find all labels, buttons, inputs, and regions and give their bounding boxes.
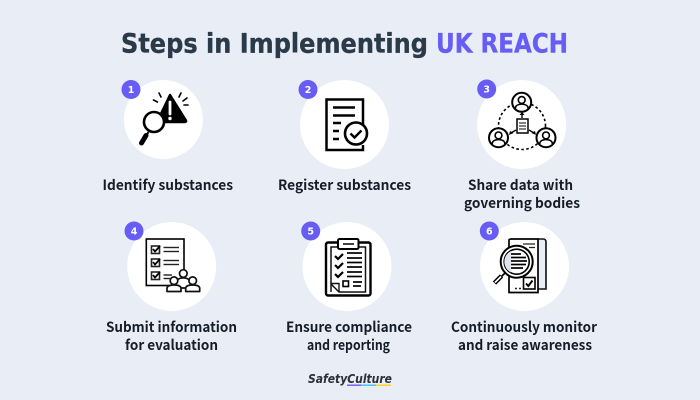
label: for evaluation: [125, 335, 218, 355]
logo: SafetyCulture: SafetyCulture: [308, 372, 392, 386]
icon: warning triangle and magnifier: [142, 93, 188, 143]
step 3: share data: [464, 80, 580, 213]
icon: magnifier over document: [494, 239, 546, 292]
step 2: register substances: [278, 80, 411, 195]
label: governing bodies: [464, 193, 580, 213]
step number badge 1: 1: [128, 85, 134, 96]
label: [464, 175, 580, 213]
step number badge 2: 2: [305, 85, 311, 96]
label: [106, 317, 237, 355]
icon: document with check: [326, 100, 367, 150]
label: and raise awareness: [458, 335, 592, 355]
step number badge 6: [480, 222, 499, 240]
title: Steps in Implementing: [121, 28, 428, 60]
label: [286, 317, 412, 355]
label: Share data with: [468, 175, 573, 195]
step number badge 4: 4: [131, 226, 138, 238]
step 6: continuously monitor: [451, 222, 598, 355]
label: Identify substances: [102, 175, 233, 195]
label: Submit information: [106, 317, 237, 337]
title: UK REACH: [436, 28, 568, 60]
label: and reporting: [307, 335, 391, 355]
step 1: identify substances: [102, 80, 233, 195]
step number badge 6: 6: [486, 226, 493, 238]
label: Register substances: [278, 175, 411, 195]
step number badge 3: 3: [483, 84, 490, 96]
label: Ensure compliance: [286, 317, 412, 337]
icon: people sharing document: [489, 93, 556, 150]
icon: clipboard checklist: [326, 239, 370, 296]
step 5: ensure compliance: [286, 222, 412, 355]
icon: checklist with people: [146, 239, 200, 292]
step 4: submit information: [106, 222, 237, 355]
label: [451, 317, 598, 355]
step number badge 5: 5: [307, 226, 314, 238]
label: Continuously monitor: [451, 317, 598, 337]
